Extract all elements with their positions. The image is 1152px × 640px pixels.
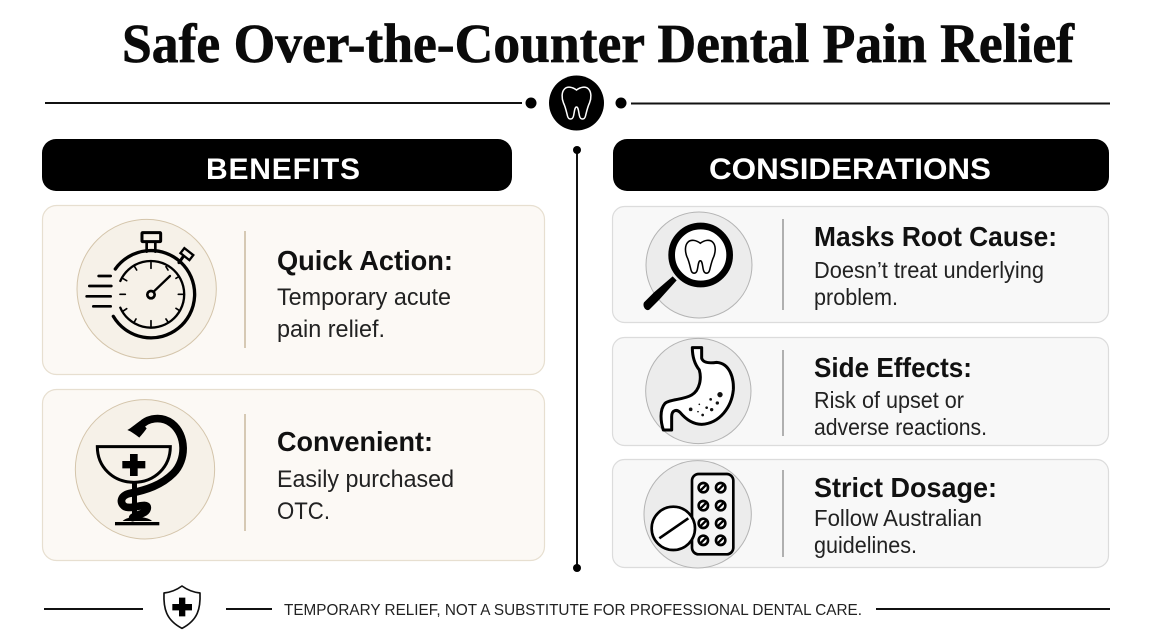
icon: magnifier over tooth: [643, 212, 752, 318]
text: masks root cause: Masks Root Cause:: [814, 221, 1057, 252]
title: Safe Over-the-Counter Dental Pain Relief: [122, 13, 1075, 74]
text: convenient: OTC.: [277, 498, 330, 525]
panel: convenient: [42, 390, 544, 560]
icon: stomach: [646, 338, 751, 444]
heading: benefits: [42, 139, 512, 191]
text: masks root cause: Doesn’t treat underlying: [814, 257, 1044, 283]
footer disclaimer: [44, 586, 1110, 628]
text: quick action: pain relief.: [277, 316, 385, 343]
text: masks root cause: problem.: [814, 284, 898, 310]
icon: tooth badge divider: [45, 76, 1110, 130]
text: side effects: [814, 352, 987, 440]
icon: blister pack and pill: [644, 461, 751, 568]
icon: stopwatch: [77, 219, 216, 359]
text: strict dosage: guidelines.: [814, 532, 917, 558]
text: quick action: Quick Action:: [277, 245, 453, 276]
text: side effects: Risk of upset or: [814, 387, 964, 413]
panel: quick action: [42, 206, 544, 374]
text: quick action: [277, 245, 453, 343]
footer disclaimer: TEMPORARY RELIEF, NOT A SUBSTITUTE FOR PROFESSIONAL DENTAL CARE.: [284, 602, 862, 619]
icon: bowl of hygieia: [75, 400, 215, 539]
text: side effects: Side Effects:: [814, 352, 972, 383]
heading: benefits: BENEFITS: [206, 153, 360, 186]
heading: considerations: [613, 139, 1109, 191]
heading: considerations: CONSIDERATIONS: [709, 153, 991, 186]
text: convenient: Easily purchased: [277, 466, 454, 493]
panel: side effects: [612, 338, 1108, 446]
center vertical divider: [573, 146, 581, 572]
text: quick action: Temporary acute: [277, 284, 451, 311]
text: convenient: Convenient:: [277, 426, 433, 457]
text: side effects: adverse reactions.: [814, 414, 987, 440]
text: strict dosage: [814, 472, 997, 558]
text: strict dosage: Follow Australian: [814, 505, 982, 531]
text: strict dosage: Strict Dosage:: [814, 472, 997, 503]
text: masks root cause: [814, 221, 1057, 310]
panel: strict dosage: [612, 460, 1108, 568]
icon: shield with cross: [164, 586, 200, 628]
text: convenient: [277, 426, 454, 525]
panel: masks root cause: [612, 206, 1108, 322]
